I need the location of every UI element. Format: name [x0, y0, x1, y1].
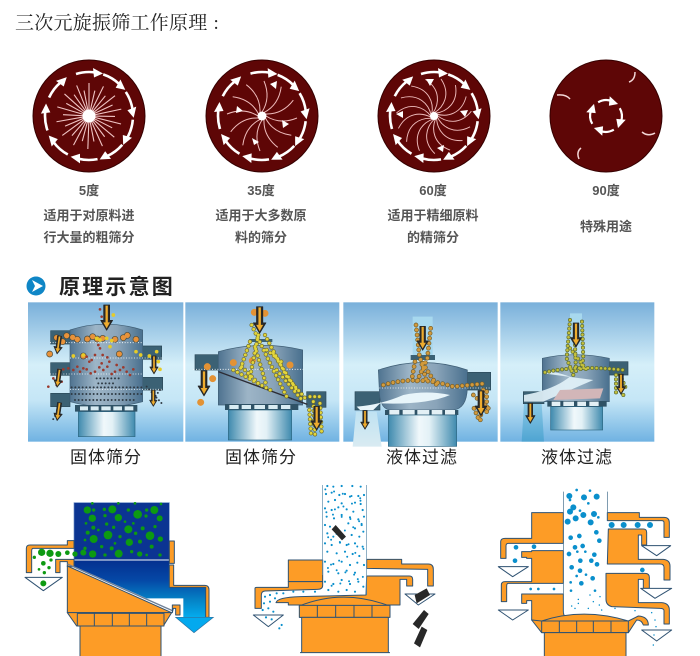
panel: 35 degree disc — [206, 60, 318, 172]
base lid — [532, 614, 648, 633]
right outlets — [367, 559, 433, 586]
large droplets — [568, 496, 650, 525]
panel: solid screening, inclined deck — [185, 302, 339, 442]
particles — [545, 320, 627, 398]
panel: 60 degree disc — [378, 60, 490, 172]
dark particles — [53, 378, 162, 420]
red particles — [48, 309, 133, 387]
ring arrows — [214, 68, 312, 165]
orange particles — [50, 335, 136, 356]
panel: 90 degree disc — [550, 60, 662, 172]
inclined machine body — [67, 566, 172, 613]
curved streaks — [227, 81, 297, 151]
green coarse particles — [83, 502, 163, 558]
central tube outline — [563, 492, 607, 613]
label: liquid filtering 2: 液体过滤 — [541, 448, 613, 467]
icon: section arrow — [26, 276, 46, 296]
spiral streaks — [396, 77, 473, 155]
caption: 90 degree — [580, 183, 632, 234]
title: 三次元旋振筛工作原理 : — [15, 12, 219, 34]
caption: 60 degree: 适用于精细原料 — [387, 208, 479, 223]
machine body — [50, 324, 163, 437]
base blocks — [299, 605, 390, 617]
black fragments — [332, 525, 430, 647]
label: solid screening 1: 固体筛分 — [70, 448, 142, 467]
diagram: inclined deck solid separation — [25, 502, 213, 656]
flow arrows — [198, 307, 322, 430]
caption: 90 degree: 特殊用途 — [580, 219, 632, 234]
white arrows — [498, 546, 672, 641]
disc background — [378, 60, 490, 172]
disc background — [550, 60, 662, 172]
machine body — [522, 313, 628, 442]
panel: liquid filtering, single deck — [343, 302, 498, 447]
base column — [300, 617, 390, 653]
ring arrows — [41, 68, 139, 165]
fine droplets — [572, 595, 656, 645]
base blocks — [77, 613, 164, 626]
caption: 35 degree — [215, 183, 307, 245]
caption: 60 degree: 的精筛分 — [407, 230, 459, 245]
white arrow: right — [405, 594, 435, 605]
edge hooks — [557, 72, 655, 159]
base column — [80, 626, 161, 656]
lower left pipe — [255, 582, 323, 608]
base lid — [299, 597, 389, 617]
base column — [544, 633, 626, 656]
caption: 90 degree: 90度 — [592, 183, 620, 198]
label: liquid filtering 1: 液体过滤 — [386, 448, 458, 467]
base blocks — [542, 621, 628, 633]
left outlets — [501, 513, 563, 558]
label: solid screening 2: 固体筛分 — [225, 448, 297, 467]
white arrow: left — [253, 615, 283, 627]
panel: liquid filtering, inclined deck — [500, 302, 654, 442]
caption: 35 degree: 料的筛分 — [235, 230, 287, 245]
diagram: single deck liquid filtering — [253, 485, 435, 653]
radial streaks — [57, 83, 121, 149]
yellow particles — [233, 325, 324, 435]
centre arrows — [585, 95, 627, 137]
feed tube — [323, 485, 367, 595]
green outlet particles — [33, 549, 86, 586]
caption: 5 degree — [43, 183, 135, 245]
caption: 35 degree: 35度 — [247, 183, 275, 198]
disc background — [33, 60, 145, 172]
blue fines arrow — [176, 617, 213, 633]
feed hopper — [74, 503, 169, 560]
orange particles — [201, 312, 290, 402]
caption: 5 degree: 适用于对原料进 — [43, 208, 135, 223]
blue fines flow — [67, 560, 206, 617]
extra droplets — [325, 489, 365, 587]
yellow particles — [73, 315, 160, 369]
caption: 60 degree: 60度 — [419, 183, 447, 198]
disc background — [206, 60, 318, 172]
caption: 5 degree: 行大量的粗筛分 — [43, 230, 135, 245]
flow arrows — [360, 326, 487, 429]
small droplets — [531, 490, 598, 591]
machine body — [193, 339, 326, 440]
caption: 35 degree: 适用于大多数原 — [215, 208, 307, 223]
white arrow: coarse outlet — [25, 577, 62, 591]
screen line — [74, 558, 169, 562]
caption: 60 degree — [387, 183, 479, 245]
right discharge pipe — [169, 541, 209, 617]
panel: 5 degree disc — [33, 60, 145, 172]
blue droplets — [263, 486, 364, 628]
medium droplets — [515, 532, 642, 583]
flow arrows — [526, 323, 626, 423]
right outlets — [607, 513, 669, 537]
machine body — [353, 317, 491, 447]
left discharge pipe — [26, 541, 74, 573]
particles — [383, 325, 488, 423]
flow arrows — [53, 305, 158, 421]
panel: solid screening, three deck — [28, 302, 183, 442]
diagram: multi deck liquid filtering — [498, 490, 672, 656]
upper left body — [288, 560, 323, 582]
ring arrows — [386, 68, 484, 165]
caption: 5 degree: 5度 — [79, 183, 99, 198]
heading: 原理示意图 — [59, 275, 175, 299]
